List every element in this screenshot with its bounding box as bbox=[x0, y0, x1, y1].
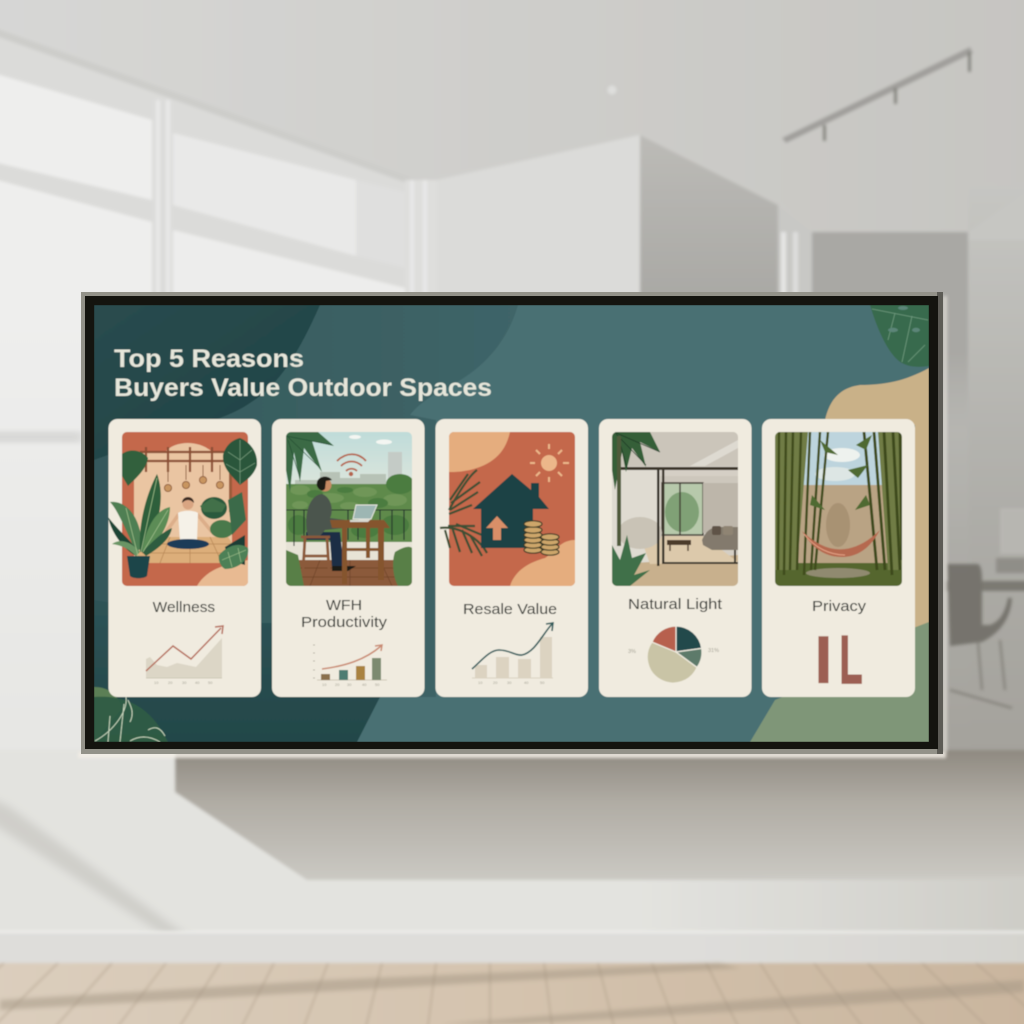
lower wall and wall shadow bbox=[0, 750, 1024, 935]
bamboo stalks bbox=[778, 432, 828, 575]
screen glow bbox=[78, 296, 947, 758]
hammock bbox=[802, 530, 880, 557]
title: Buyers Value Outdoor Spaces bbox=[114, 374, 492, 402]
ceiling detector bbox=[606, 84, 618, 96]
pie labels: 3% bbox=[628, 649, 636, 655]
label: WFH bbox=[326, 597, 362, 614]
bar chart with arrow: 30 bbox=[347, 682, 352, 687]
illustration: yoga terrace bbox=[108, 432, 257, 586]
chair leg bbox=[950, 640, 1012, 708]
baseboard bbox=[0, 932, 1024, 963]
monstera leaf bottom left bbox=[94, 687, 168, 742]
wifi icon bbox=[337, 454, 366, 475]
dark teal blob top bbox=[94, 305, 320, 460]
wood floor bbox=[0, 963, 1024, 1024]
screen frame bbox=[81, 292, 943, 754]
coin stacks bbox=[524, 521, 559, 555]
large letters: I bbox=[814, 622, 833, 698]
pie chart bbox=[647, 626, 702, 683]
table bbox=[330, 520, 390, 584]
bar chart with arrow: 50 bbox=[375, 682, 380, 687]
chair bbox=[947, 564, 1012, 646]
area chart with arrow bbox=[146, 626, 223, 685]
pillar and back wall bbox=[437, 135, 968, 310]
monstera leaf top right bbox=[870, 305, 929, 367]
left wall bbox=[0, 300, 90, 770]
bar chart with arrow: 40 bbox=[362, 682, 367, 687]
area chart with arrow: 10 bbox=[154, 680, 159, 685]
illustration: sunlit living room bbox=[612, 432, 738, 586]
combo chart with arrow: 30 bbox=[507, 680, 512, 685]
sage blob bbox=[750, 622, 929, 742]
panel: wellness bbox=[108, 419, 261, 697]
palm bbox=[286, 432, 334, 492]
area chart with arrow: 20 bbox=[168, 680, 173, 685]
label: Resale Value bbox=[463, 601, 557, 618]
house bbox=[473, 474, 549, 548]
panel: WFH productivity bbox=[272, 419, 424, 697]
monitor bbox=[1000, 508, 1024, 554]
illustration: balcony office bbox=[286, 432, 414, 586]
pie labels: 31% bbox=[708, 648, 719, 654]
potted plant with large leaves bbox=[108, 474, 172, 578]
window wall bbox=[0, 26, 437, 310]
combo chart with arrow: 10 bbox=[478, 680, 483, 685]
bar chart with arrow bbox=[313, 645, 387, 687]
palm bbox=[612, 432, 660, 490]
illustration: bamboo and hammock bbox=[775, 432, 902, 586]
person at laptop bbox=[306, 477, 356, 571]
plant bottom bbox=[612, 535, 650, 586]
combo chart with arrow: 20 bbox=[493, 680, 498, 685]
tan blob bbox=[824, 368, 929, 630]
label: Wellness bbox=[153, 599, 215, 616]
bar chart with arrow: 20 bbox=[335, 682, 340, 687]
dark teal blob bottom bbox=[94, 616, 380, 742]
ceiling bbox=[0, 0, 1024, 232]
area chart with arrow: 40 bbox=[195, 680, 200, 685]
combo chart with arrow: 40 bbox=[524, 680, 529, 685]
laptop bbox=[350, 505, 377, 522]
large letters bbox=[814, 622, 862, 698]
blurred office furniture behind bbox=[945, 508, 1024, 708]
illustration: house and coins bbox=[440, 432, 575, 586]
track light bbox=[782, 47, 973, 143]
area chart with arrow: 50 bbox=[208, 680, 213, 685]
area chart with arrow: 30 bbox=[182, 680, 187, 685]
side bamboo density bbox=[775, 432, 902, 570]
mid teal blob bbox=[94, 305, 518, 697]
person meditating bbox=[166, 497, 212, 549]
combo chart with arrow: 50 bbox=[540, 680, 545, 685]
desk box bbox=[996, 558, 1024, 573]
pie labels bbox=[628, 648, 719, 655]
large letters: L bbox=[840, 622, 862, 698]
palm fronds bbox=[440, 470, 487, 556]
monstera bbox=[223, 438, 257, 485]
bar chart with arrow: 10 bbox=[322, 682, 327, 687]
title: Top 5 Reasons bbox=[114, 345, 304, 373]
desk top bbox=[945, 581, 1024, 591]
label: Privacy bbox=[812, 598, 867, 615]
right side plants bbox=[200, 492, 248, 569]
hanging lights bbox=[164, 465, 224, 492]
stool bbox=[301, 537, 330, 570]
hanging fern bbox=[122, 451, 148, 486]
panel: resale value bbox=[436, 419, 588, 697]
right wall bbox=[968, 186, 1024, 946]
title bbox=[114, 345, 492, 402]
sun bbox=[530, 444, 569, 482]
label bbox=[301, 597, 388, 631]
panel: privacy bbox=[762, 419, 915, 698]
panel: natural light bbox=[599, 419, 752, 697]
label: Productivity bbox=[301, 614, 388, 631]
infographic slide bbox=[94, 305, 929, 742]
label: Natural Light bbox=[628, 596, 723, 613]
combo chart with arrow bbox=[472, 623, 553, 685]
slide background bbox=[356, 305, 929, 742]
